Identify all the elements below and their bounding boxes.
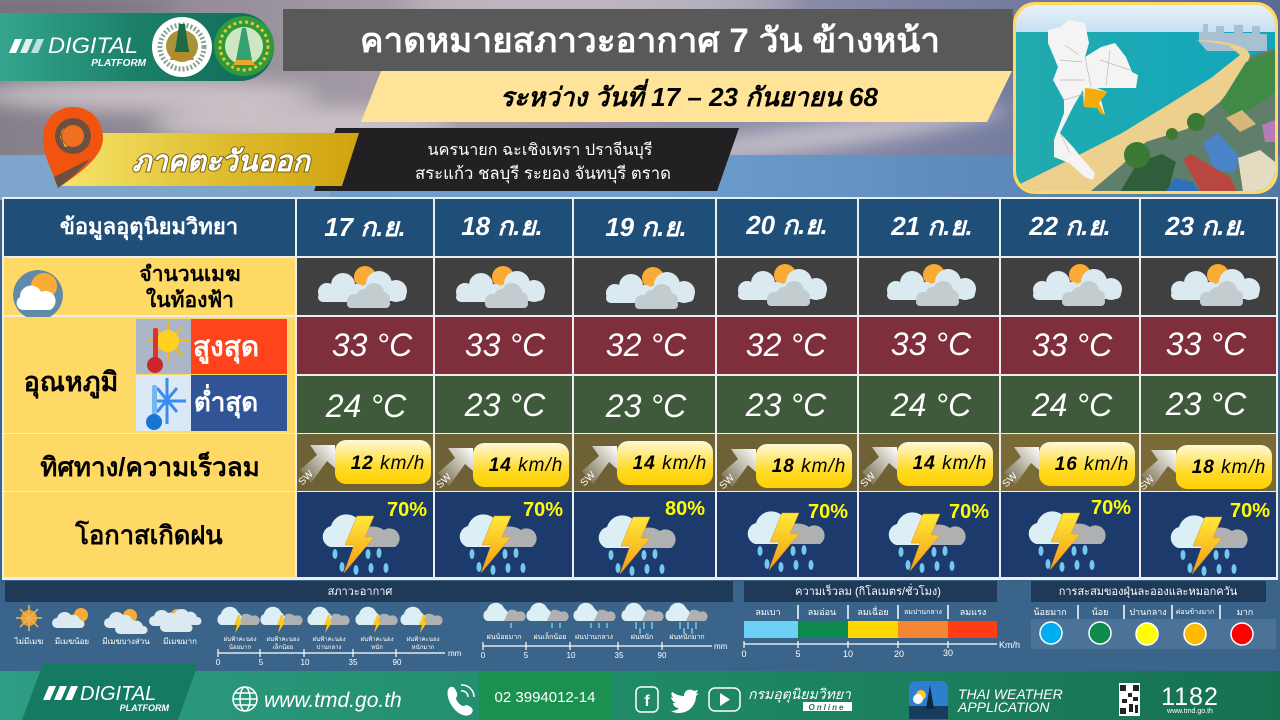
legend icons: rain: ฝนน้อยมาก [487, 633, 521, 641]
row: temperature: 33 °C [1166, 326, 1247, 362]
legend: wind speed [741, 581, 1020, 659]
legend icons: thunderstorms: mm [448, 649, 462, 658]
digital platform wordmark: DIGITAL [48, 33, 138, 58]
row: wind: 18 km/h [772, 456, 846, 477]
legend icons: rain: 0 [481, 651, 486, 660]
row: temperature: 33 °C [1032, 327, 1113, 363]
legend: wind speed: ลมแรง [960, 607, 986, 617]
TMD online: Online [809, 703, 845, 712]
legend: weather conditions [5, 581, 733, 667]
Thai Weather Application [957, 686, 1063, 715]
icon: globe [233, 687, 257, 711]
legend: wind speed: ลมเฉื่อย [857, 605, 889, 617]
table header: 23 ก.ย. [1164, 211, 1247, 241]
seal: Thai Meteorological Department [214, 16, 274, 76]
legend icons: rain: mm [714, 642, 728, 651]
legend: dust and haze [1031, 581, 1276, 649]
legend: wind speed: 30 [943, 648, 953, 658]
row: chance of rain: โอกาสเกิดฝน [74, 520, 223, 550]
legend icons: rain: 35 [615, 651, 624, 660]
row: wind: 16 km/h [1055, 454, 1129, 475]
legend: wind speed: ความเร็วลม (กิโลเมตร/ชั่วโมง) [795, 583, 941, 598]
legend icons: rain: ฝนเล็กน้อย [534, 632, 566, 641]
legend: wind speed: Km/h [999, 640, 1020, 650]
legend icons: sky: มีเมฆมาก [163, 637, 197, 646]
legend icons: sky: ไม่มีเมฆ [14, 637, 43, 646]
photo with map of Thailand [1013, 2, 1278, 194]
legend icons: thunderstorms: เล็กน้อย [273, 642, 293, 651]
row: temperature: 33 °C [332, 327, 413, 363]
legend icons: thunderstorms: หนัก [371, 644, 383, 651]
row: sky cover [4, 258, 1276, 320]
min temperature label [136, 375, 287, 431]
phone number [479, 671, 611, 720]
legend icons: thunderstorms: 5 [259, 658, 264, 667]
row: wind: 18 km/h [1192, 457, 1266, 478]
legend icons: thunderstorms: หนักมาก [412, 644, 435, 651]
footer digital platform logo [22, 664, 198, 720]
website: www.tmd.go.th [264, 689, 402, 712]
row: chance of rain [4, 492, 1276, 577]
legend: wind speed: ลมเบา [755, 607, 781, 617]
hotline 1182: 1182 [1161, 683, 1219, 711]
legend icons: thunderstorms: 90 [393, 658, 402, 667]
legend: dust and haze: น้อยมาก [1033, 607, 1067, 617]
legend: dust and haze: น้อย [1092, 607, 1108, 617]
max temperature label: สูงสุด [193, 331, 259, 364]
icon: location pin [43, 107, 103, 188]
title bar: คาดหมายสภาวะอากาศ 7 วัน ข้างหน้า [360, 22, 940, 60]
QR code [1119, 683, 1140, 716]
legend icons: rain: ฝนปานกลาง [575, 634, 613, 641]
row: wind: 14 km/h [489, 455, 563, 476]
legend: wind speed: 0 [741, 649, 747, 659]
icon: Thai Weather app [909, 681, 948, 719]
table header: 22 ก.ย. [1028, 211, 1111, 241]
title bar [283, 9, 1013, 71]
legend icons: sky: มีเมฆบางส่วน [102, 637, 150, 646]
row: temperature: 23 °C [745, 387, 827, 423]
region banner: ภาคตะวันออก [132, 146, 312, 178]
table header: 19 ก.ย. [605, 212, 687, 242]
min temperature label: ต่ำสุด [194, 383, 258, 419]
date range banner: ระหว่าง วันที่ 17 – 23 กันยายน 68 [500, 78, 879, 112]
phone number: 02 3994012-14 [495, 689, 595, 706]
table header: 20 ก.ย. [745, 210, 828, 240]
legend: dust and haze: การสะสมของฝุ่นละอองและหมอกควัน [1059, 586, 1238, 598]
icon: phone [448, 685, 474, 716]
province list panel: นครนายก ฉะเชิงเทรา ปราจีนบุรี [428, 141, 653, 160]
table header: 17 ก.ย. [324, 212, 406, 242]
row: wind: 14 km/h [913, 453, 987, 474]
legend: weather conditions: สภาวะอากาศ [328, 586, 392, 598]
legend icons: thunderstorms [216, 607, 462, 667]
legend icons: rain: ฝนหนักมาก [669, 633, 705, 641]
legend icons: thunderstorms: 35 [349, 658, 358, 667]
legend: dust and haze: ปานกลาง [1129, 607, 1167, 617]
row: temperature: 24 °C [325, 388, 407, 424]
table header: 21 ก.ย. [890, 211, 973, 241]
row: temperature [4, 317, 1276, 433]
row: temperature: 23 °C [605, 388, 687, 424]
legend icons: thunderstorms: ฝนฟ้าคะนอง [223, 636, 257, 643]
footer digital platform logo: PLATFORM [120, 703, 169, 713]
table header: 18 ก.ย. [461, 211, 543, 241]
row: sky cover: ในท้องฟ้า [146, 287, 234, 312]
TMD online [748, 686, 852, 712]
legend icons: sky [14, 605, 202, 646]
weather table [2, 197, 1278, 580]
max temperature label [136, 319, 287, 374]
digital platform wordmark [9, 33, 147, 69]
legend icons: thunderstorms: 0 [216, 658, 221, 667]
region banner [60, 133, 359, 186]
footer digital platform logo: DIGITAL [80, 683, 156, 705]
social icons [636, 687, 740, 713]
legend icons: thunderstorms: ฝนฟ้าคะนอง [266, 636, 300, 643]
row: wind: 12 km/h [351, 453, 425, 474]
province list panel: สระแก้ว ชลบุรี ระยอง จันทบุรี ตราด [415, 164, 671, 184]
row: sky cover: จำนวนเมฆ [139, 263, 241, 286]
row: temperature: อุณหภูมิ [24, 367, 118, 399]
icon: sun and cloud badge [13, 270, 63, 320]
row: chance of rain: 70% [949, 501, 989, 523]
legend: dust and haze: มาก [1237, 607, 1253, 617]
row: chance of rain: 80% [665, 498, 705, 520]
hotline 1182: www.tmd.go.th [1166, 708, 1213, 715]
legend: dust and haze: ค่อนข้างมาก [1176, 608, 1214, 616]
row: chance of rain: 70% [523, 499, 563, 521]
social icons: f [644, 693, 650, 710]
row: temperature: 33 °C [891, 326, 972, 362]
legend icons: rain: ฝนหนัก [631, 633, 653, 641]
row: temperature: 24 °C [1031, 387, 1113, 423]
legend icons: thunderstorms: ฝนฟ้าคะนอง [406, 636, 440, 643]
legend icons: thunderstorms: ฝนฟ้าคะนอง [360, 636, 394, 643]
legend icons: rain: 10 [567, 651, 576, 660]
map of Thailand [1048, 20, 1138, 180]
legend icons: thunderstorms: ฝนฟ้าคะนอง [312, 636, 346, 643]
Thai Weather Application: THAI WEATHER [958, 686, 1063, 702]
table header [4, 199, 1276, 256]
legend: wind speed: 5 [795, 649, 801, 659]
digital platform wordmark: PLATFORM [91, 58, 147, 69]
footer bar [0, 664, 1280, 720]
legend: wind speed: ลมอ่อน [808, 607, 836, 617]
row: temperature: 23 °C [464, 387, 546, 423]
date range banner [361, 71, 1012, 122]
row: temperature: 23 °C [1165, 386, 1247, 422]
Thai Weather Application: APPLICATION [957, 699, 1050, 715]
legend: wind speed: 10 [843, 649, 853, 659]
row: wind [4, 434, 1276, 493]
row: chance of rain: 70% [808, 501, 848, 523]
row: temperature: 24 °C [890, 387, 972, 423]
row: wind: 14 km/h [633, 453, 707, 474]
row: wind: ทิศทาง/ความเร็วลม [40, 451, 260, 482]
legend icons: thunderstorms: ปานกลาง [317, 644, 342, 651]
legend icons: thunderstorms: 10 [301, 658, 310, 667]
TMD online: กรมอุตุนิยมวิทยา [748, 686, 852, 703]
legend icons: rain [481, 603, 728, 660]
row: chance of rain: 70% [1230, 500, 1270, 522]
legend: wind speed: ลมปานกลาง [904, 609, 942, 616]
legend icons: rain: 90 [658, 651, 667, 660]
province list panel [314, 128, 739, 191]
table header: ข้อมูลอุตุนิยมวิทยา [60, 214, 238, 241]
seal: Ministry of Digital Economy [152, 17, 212, 77]
legend icons: thunderstorms: น้อยมาก [229, 644, 251, 651]
legend: wind speed: 20 [894, 649, 904, 659]
legend icons: sky: มีเมฆน้อย [55, 637, 89, 646]
logo banner: Digital Platform [0, 13, 274, 81]
row: chance of rain: 70% [387, 499, 427, 521]
row: temperature: 32 °C [606, 327, 687, 363]
legend icons: rain: 5 [524, 651, 529, 660]
row: temperature: 32 °C [746, 327, 827, 363]
row: temperature: 33 °C [465, 327, 546, 363]
row: chance of rain: 70% [1091, 497, 1131, 519]
